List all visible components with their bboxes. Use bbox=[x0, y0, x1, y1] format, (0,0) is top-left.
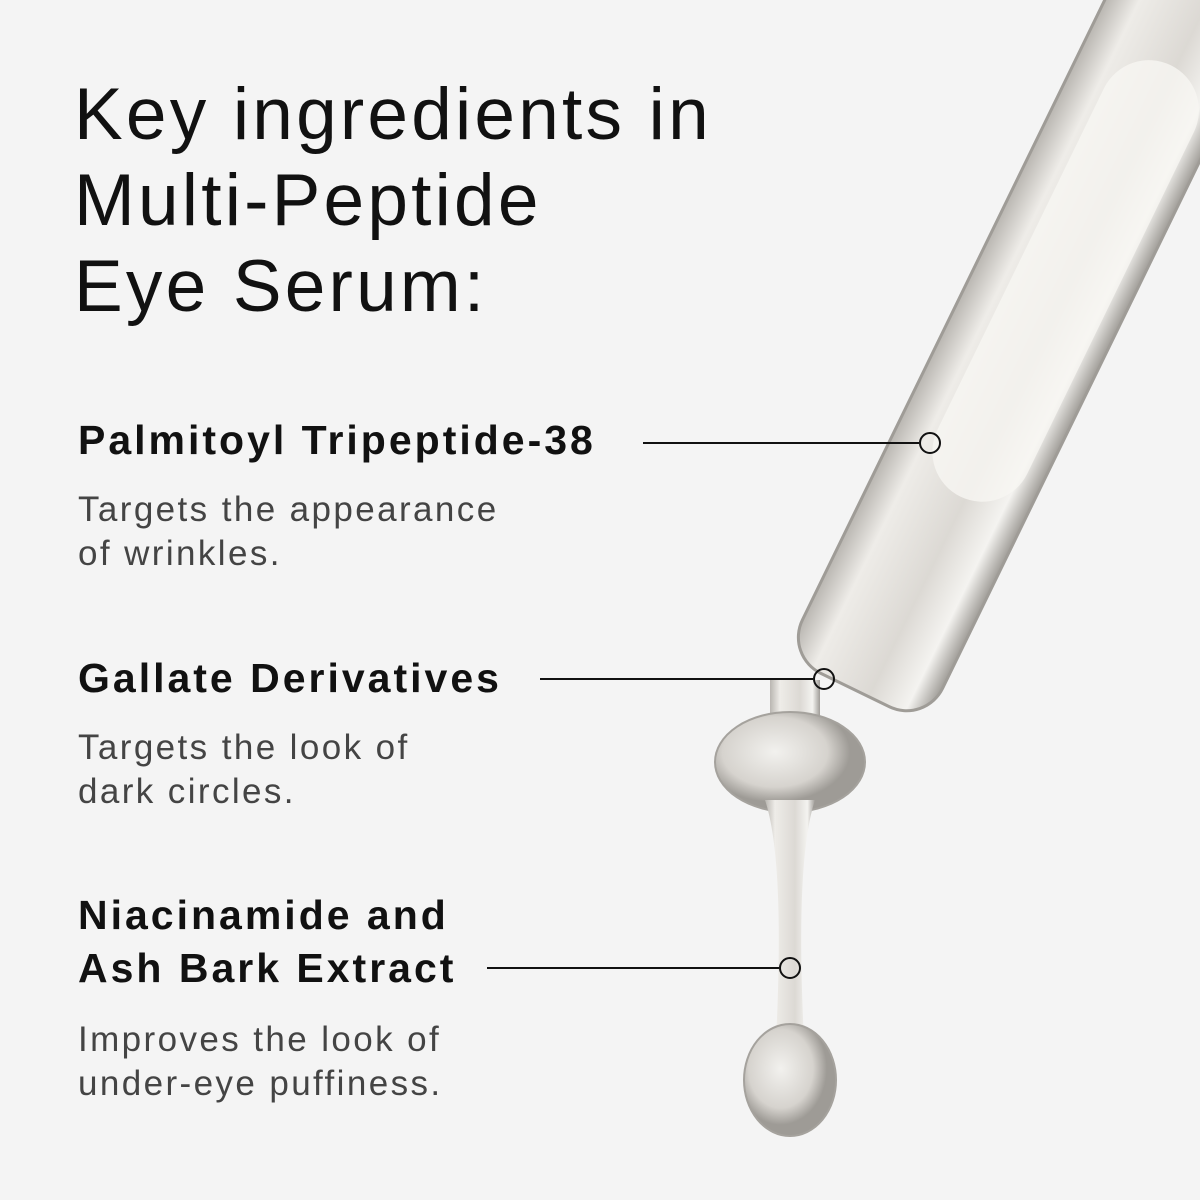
heading: Niacinamide: Niacinamide and bbox=[78, 892, 449, 938]
title: Eye Serum: bbox=[74, 246, 487, 327]
text: puffiness bbox=[78, 1020, 443, 1103]
text: wrinkles bbox=[78, 490, 499, 573]
text: puffiness: under-eye puffiness. bbox=[78, 1064, 443, 1103]
text: dark circles: Targets the look of bbox=[78, 728, 410, 767]
title: Multi-Peptide bbox=[74, 160, 542, 241]
text: dark circles: dark circles. bbox=[78, 772, 296, 811]
heading: Niacinamide bbox=[78, 892, 456, 991]
title: Key ingredients in bbox=[74, 74, 712, 155]
heading: Niacinamide: Ash Bark Extract bbox=[78, 945, 456, 991]
title bbox=[74, 74, 712, 327]
heading: Gallate: Gallate Derivatives bbox=[78, 655, 502, 701]
text: wrinkles: Targets the appearance bbox=[78, 490, 499, 529]
text: wrinkles: of wrinkles. bbox=[78, 534, 282, 573]
text: puffiness: Improves the look of bbox=[78, 1020, 441, 1059]
heading: Palmitoyl: Palmitoyl Tripeptide-38 bbox=[78, 417, 596, 463]
text: dark circles bbox=[78, 728, 410, 811]
